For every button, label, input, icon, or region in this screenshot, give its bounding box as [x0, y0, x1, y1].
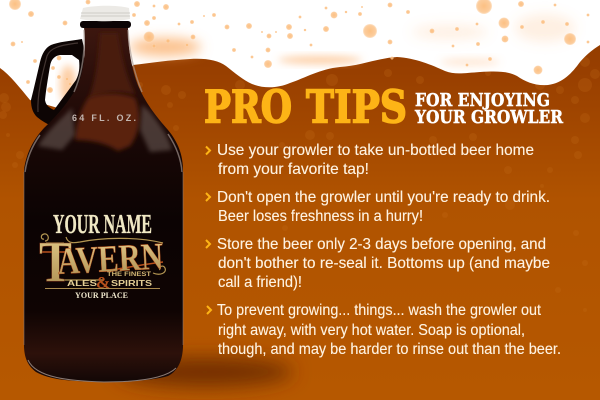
logo finest: THE FINEST — [107, 272, 151, 278]
tips list — [206, 142, 561, 358]
heading: subtitle line two: YOUR GROWLER — [414, 107, 564, 128]
bottle handle — [31, 39, 84, 126]
cap ridges — [81, 13, 130, 16]
tip 1: Use your growler to take un-bottled beer home — [217, 142, 534, 159]
glass body — [24, 27, 183, 382]
logo ampersand: & — [96, 273, 110, 292]
shoulder amber reflection — [75, 94, 139, 151]
logo spirits: SPIRITS — [111, 279, 153, 288]
tip 4: To prevent growing... things... wash the growler out — [217, 302, 541, 319]
side highlights — [24, 172, 183, 345]
tip 3: don't bother to re-seal it. Bottoms up (and maybe — [218, 255, 550, 272]
neck ring — [80, 21, 131, 28]
bottle shadow — [117, 357, 293, 387]
foam orange shading — [60, 14, 575, 105]
tip 1 — [206, 142, 534, 178]
logo: Your Name Tavern — [39, 209, 165, 300]
embossed volume: 64 FL. OZ. — [72, 113, 136, 123]
cap — [80, 6, 130, 21]
logo tavern T: T — [39, 229, 72, 294]
tip 2 — [206, 189, 550, 225]
tip 2: Beer loses freshness in a hurry! — [218, 208, 423, 225]
logo place: YOUR PLACE — [75, 291, 128, 300]
tip 2: Don't open the growler until you're ready to drink. — [217, 189, 550, 206]
heading: tips: TIPS — [306, 80, 407, 134]
logo tavern rest: AVERN — [56, 235, 164, 283]
tip 3: Store the beer only 2-3 days before opening, and — [217, 236, 546, 253]
tip 3 — [206, 236, 550, 291]
shoulder grey reflections — [38, 105, 172, 152]
logo scrolls — [41, 234, 165, 280]
heading: pro: PRO — [204, 80, 292, 134]
tip 3: call a friend)! — [218, 274, 302, 291]
base highlight — [28, 360, 176, 382]
logo rule — [45, 288, 160, 289]
heading: subtitle line one: FOR ENJOYING — [415, 90, 550, 111]
logo ales: ALES — [67, 279, 98, 288]
tip 4 — [207, 302, 561, 358]
handle highlight — [38, 43, 78, 112]
foam bubbles — [9, 0, 590, 93]
tip 4: right away, with very hot water. Soap is optional, — [218, 322, 525, 339]
growler bottle — [24, 6, 183, 382]
heading — [204, 80, 564, 134]
logo name: YOUR NAME — [53, 209, 152, 239]
neck amber — [88, 33, 136, 100]
glass highlights — [25, 30, 182, 172]
beer foam — [0, 0, 600, 120]
background bubbles in beer — [0, 57, 600, 322]
tip 1: from your favorite tap! — [218, 161, 369, 178]
tip 4: though, and may be harder to rinse out than the beer. — [218, 341, 561, 358]
logo orange flourish — [42, 252, 163, 271]
